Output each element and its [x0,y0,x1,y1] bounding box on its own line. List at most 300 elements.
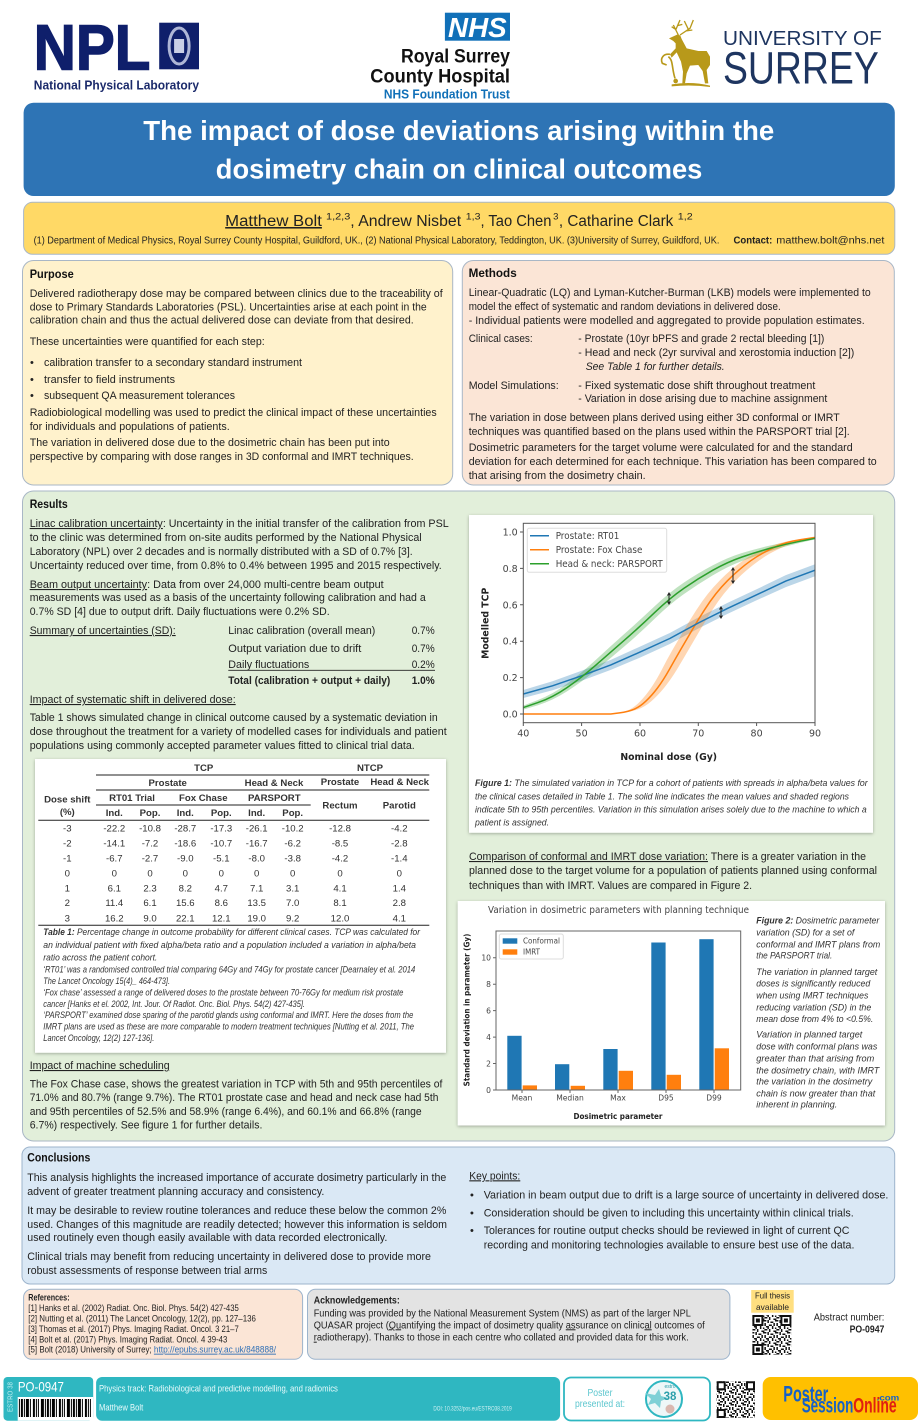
comparison text: planned dose to the target volume for a population of patients planned using conformal [469,865,877,877]
footer: poster presented at: presented at: [575,1399,625,1410]
table 1 caption: IMRT plans are used as these are more comparable to modern treatment techniques [Nutting et al. 2011, The [43,1022,414,1032]
figure 2 caption: the PARSPORT trial. [756,951,832,962]
comparison text: techniques than with IMRT. Values are compared in Figure 2. [469,880,752,892]
beam output text: 0.7% SD [4] due to output drift. Daily fluctuations were 0.2% SD. [30,606,330,618]
logo: NHS Royal Surrey County Hospital: County Hospital [370,67,510,88]
table row: 1: 6.1 [108,883,121,894]
table row: -3: -17.3 [210,824,232,835]
purpose text: subsequent QA measurement tolerances [44,390,235,402]
table row: -2: -2.8 [391,838,408,849]
panel: references [24,1289,303,1359]
QR code: footer [717,1381,755,1418]
axes frame [496,931,741,1090]
table row: -1: -1 [63,853,72,864]
poster id: PO-0947 [18,1379,64,1395]
table 1 header: Prostate [149,778,187,789]
figure 2 caption: the dosimetry chain, with IMRT [756,1065,880,1076]
table row: 1: 1.4 [393,883,407,894]
table row: -3: -22.2 [103,824,125,835]
table row: -3: -10.8 [139,824,161,835]
key points: Key points: [469,1170,520,1182]
table row: 2: 6.1 [143,898,157,909]
ESTRO 38 logo: estro [664,1384,676,1390]
table 1 header: Pop. [140,808,160,819]
table row: -1: -9.0 [177,853,194,864]
purpose text: • [30,357,34,369]
table row: 3: 12.1 [212,913,231,924]
figure 1 caption: patient is assigned. [474,818,549,829]
bars: conformal [507,939,714,1090]
table 1 header: NTCP [357,763,384,774]
systematic shift text: Impact of systematic shift in delivered dose: [30,694,236,706]
table row: 0: 0 [219,868,224,879]
affiliations: (1) Department of Medical Physics, Royal Surrey County Hospital, Guildford, UK., (2) National Physical Laboratory, Teddington, UK. (3)University of Surrey, Guildford, UK. [34,235,719,246]
methods text [469,287,877,482]
arrow: fox chase range [732,568,734,583]
reference list: [4] Bolt et al. (2017) Phys. Imaging Radiat. Oncol. 4 39-43 [28,1334,227,1344]
y axis tick labels: 0.8 [503,564,518,575]
table 1 caption: ‘PARSPORT’ examined dose sparing of the parotid glands using conformal and IMRT. Here the doses from the [43,1010,413,1020]
table row: 2: 2 [65,898,70,909]
table row: -2: -8.5 [332,838,348,849]
logo: PosterSessionOnline: Online [853,1395,897,1418]
ESTRO 38 logo [645,1381,682,1417]
purpose text [30,288,444,463]
methods text: deviation for each determined for each technique. This variation has been compared to [469,456,877,468]
summary of uncertainties table [30,625,435,687]
arrow: rt01 range [720,607,722,618]
table 1 header: TCP [194,763,214,774]
table 1 header [38,763,430,820]
purpose text: Delivered radiotherapy dose may be compared between clinics due to the traceability of [30,288,444,300]
heading: acknowledgements: Acknowledgements: [314,1295,400,1306]
table row: 3: 9.2 [286,913,299,924]
icon: stag crest [662,20,710,87]
footer: poster id block [4,1377,93,1421]
y axis tick labels: 4 [486,1033,491,1042]
purpose text: transfer to field instruments [44,374,175,386]
y axis tick labels: 6 [486,1007,491,1016]
figure 2 caption: variation (SD) for a set of [756,928,856,939]
reference list: [2] Nutting et al. (2011) The Lancet Oncology, 12(2), pp. 127–136 [28,1313,256,1323]
table 1 header: Dose shift [44,795,91,806]
y axis tick labels: 0.6 [503,600,518,611]
methods text: - Fixed systematic dose shift throughout treatment [578,380,815,392]
table row: -2: -6.2 [284,838,301,849]
table 1 caption: cancer [Hanks et el. 2002, Int. Jour. Of Radiot. Onc. Biol. Phys. 54(2) 427-435]. [43,999,305,1009]
authors: , Tao Chen [480,213,551,230]
figure 1 caption: indicate 5th to 95th percentiles. Variation in this simulation arises solely due to the machine to which a [475,805,867,816]
table row: 1: 3.1 [286,883,299,894]
table row: -2: -18.6 [174,838,196,849]
methods text: The variation in dose between plans derived using either 3D conformal or IMRT [469,412,840,424]
comparison text [469,851,877,892]
y axis tick labels [503,528,518,720]
y axis title: Standard deviation in parameter (Gy) [462,934,471,1086]
table row: -3: -10.2 [282,824,304,835]
figure 2 caption: mean dose from 4% to <0.5%. [756,1014,873,1025]
table row: 2: 2.8 [393,898,406,909]
table row: 2: 8.1 [333,898,347,909]
x axis tick labels [512,1094,722,1103]
table row: 0: 0 [112,868,117,879]
purpose text: These uncertainties were quantified for each step: [30,336,265,348]
figure 2 card [458,901,885,1126]
legend: Prostate: Fox Chase [556,545,643,556]
comparison text: Comparison of conformal and IMRT dose variation: There is a greater variation in the [469,851,866,863]
full thesis badge: available [756,1302,789,1312]
reference list: [5] Bolt (2018) University of Surrey; [28,1345,152,1355]
summary of uncertainties table: 0.7% [412,643,435,655]
table row: 1: 4.1 [333,883,347,894]
table 1 caption: The Lancet Oncology 15(4)_ 464-473]. [43,976,170,986]
logo: National Physical Laboratory: National Physical Laboratory [34,78,199,92]
table 1 header: Parotid [383,801,416,812]
figure 1 card [469,515,873,833]
table row: 2: 8.6 [215,898,228,909]
table 1 header: PARSPORT [248,793,301,804]
linac calibration text: Laboratory (NPL) over 2 decades and is normally distributed with a SD of 0.7% [3]. [30,546,413,558]
table row: -2 [63,838,408,849]
logo: University of Surrey [662,20,882,93]
table row: -2: -16.7 [246,838,268,849]
table row: -1: -5.1 [213,853,230,864]
table 1 caption: ratio across the patient cohort. [43,953,157,964]
y axis tick labels: 0.2 [503,673,518,684]
x axis tick labels: 90 [809,729,821,740]
table row: 1: 4.7 [215,883,228,894]
figure 2 caption: Variation in planned target [756,1030,863,1041]
table 1 header: Ind. [106,808,123,819]
table row: 1: 2.3 [143,883,157,894]
y axis tick labels: 10 [481,954,491,963]
abstract number [814,1313,885,1335]
footer: poster presented at [564,1378,710,1420]
figure 2 caption: chain is now greater than that [756,1088,876,1099]
table 1 header: Fox Chase [179,793,228,804]
figure 1 caption [474,778,868,829]
table row: -1 [63,853,408,864]
purpose text: The variation in delivered dose due to the dosimetric chain has been put into [30,437,390,449]
table 1 card [35,759,446,1053]
beam output text: Beam output uncertainty: Data from over 24,000 multi-centre beam output [30,579,384,591]
conclusions text [27,1172,447,1277]
legend [499,934,563,959]
authors [225,212,693,230]
methods text: - Head and neck (2yr survival and xerostomia induction [2]) [578,347,854,359]
table row: 3: 9.0 [143,913,157,924]
legend: Head & neck: PARSPORT [556,559,663,570]
table 1 header: Ind. [248,808,265,819]
summary of uncertainties table: Summary of uncertainties (SD): [30,625,176,637]
reference list: [1] Hanks et al. (2002) Radiat. Onc. Biol. Phys. 54(2) 427-435 [28,1303,239,1313]
table 1 header: Head & Neck [370,777,430,788]
table row: -3: -12.8 [329,824,351,835]
machine scheduling text: 6.7%) respectively. See figure 1 for further details. [30,1120,262,1132]
panel: methods [462,260,894,485]
reference list [28,1303,276,1355]
conclusions text: advent of greater treatment planning accuracy and consistency. [27,1186,324,1198]
methods text: that arising from the dosimetry chain. [469,470,646,482]
logo: NHS Royal Surrey County Hospital: Royal Surrey [401,47,510,68]
title banner [24,103,895,196]
x axis tick labels: 80 [751,729,763,740]
x axis tick labels: D99 [706,1094,722,1103]
table row: 3: 22.1 [176,913,195,924]
table row: 0: 0 [337,868,343,879]
full thesis badge: Full thesis [755,1290,790,1300]
conclusions text: This analysis highlights the increased importance of accurate dosimetry particularly in the [27,1172,446,1184]
figure 1 caption: the clinical cases detailed in Table 1. The solid line indicates the mean values and shaded regions [475,791,849,802]
table 1 caption: Table 1: Percentage change in outcome probability for different clinical cases. TCP was calculated for [43,927,421,938]
table 1 header: Ind. [177,808,194,819]
conclusions text: robust assessments of response between trial arms [27,1265,268,1277]
systematic shift text [30,694,447,752]
heading: results: Results [30,499,68,511]
systematic shift text: dose throughout the treatment for a variety of modelled cases for individuals and patient [30,726,447,738]
key points: • [470,1189,474,1201]
authors panel [24,202,895,254]
key points: Tolerances for routine output checks should be reviewed in light of current QC [484,1225,849,1237]
figure 2 caption: inherent in planning. [756,1100,837,1111]
panel: acknowledgements [308,1289,730,1359]
purpose text: perspective by comparing with dose ranges in 3D conformal and IMRT techniques. [30,451,414,463]
purpose text: for individuals and populations of patients. [30,421,230,433]
figure 2 caption: reducing variation (SD) in the [756,1003,871,1014]
table 1 caption [43,927,421,1043]
y axis tick labels: 1.0 [503,528,518,538]
acknowledgements text: radiotherapy). Thanks to those in each centre who collated and provided data for this work. [314,1333,689,1344]
conclusions text: It may be desirable to review routine tolerances and reduce these below the common 2% [27,1205,447,1217]
purpose text: calibration chain and thus the actual delivered dose can deviate from that desired. [30,315,414,327]
logo: NHS Royal Surrey County Hospital: NHS Foundation Trust [384,86,511,101]
key points: recording and monitoring technologies available to ensure best use of the data. [484,1239,854,1251]
heading: references: References: [28,1293,70,1303]
authors: 1,2 [678,212,693,222]
table row: -1: -2.7 [142,853,158,864]
table row: -3 [63,824,408,835]
methods text: Linear-Quadratic (LQ) and Lyman-Kutcher-Burman (LKB) models were implemented to [469,287,871,299]
machine scheduling text: The Fox Chase case, shows the greatest variation in TCP with 5th and 95th percentiles of [30,1079,443,1091]
y axis tick labels: 0.4 [503,637,518,648]
summary of uncertainties table: Daily fluctuations [228,659,310,671]
systematic shift text: populations using commonly accepted parameter values fitted to clinical trial data. [30,740,415,752]
logo: PosterSessionOnline [763,1377,918,1420]
table 1 header: Rectum [322,801,358,812]
panel: conclusions [22,1147,895,1284]
contact: Contact: [734,235,772,246]
reference list: http://epubs.surrey.ac.uk/848888/ [154,1345,276,1355]
acknowledgements text: QUASAR project (Quantifying the impact of dosimetry quality assurance on clinical outcomes of [314,1320,705,1331]
key points [469,1170,888,1251]
methods text: Dosimetric parameters for the target volume were calculated for and the standard [469,442,853,454]
key points: Variation in beam output due to drift is a large source of uncertainty in delivered dose. [484,1189,888,1201]
logo: National Physical Laboratory [34,11,199,92]
machine scheduling text: Impact of machine scheduling [30,1060,170,1072]
figure 2 caption: The variation in planned target [756,967,878,978]
table row: -3: -26.1 [246,824,268,835]
table row: -1: -4.2 [332,853,348,864]
contact [734,235,885,246]
logo: PosterSessionOnline: Session [802,1395,853,1418]
x axis tick labels: D95 [658,1094,674,1103]
x axis tick labels: 70 [692,729,704,740]
legend [527,528,667,572]
x axis tick labels: Mean [512,1094,533,1103]
acknowledgements text [314,1309,705,1344]
footer: poster presented at: Poster [588,1388,613,1399]
figure 2 caption: Figure 2: Dosimetric parameter [756,916,880,927]
summary of uncertainties table: Output variation due to drift [228,643,361,655]
logo: National Physical Laboratory: NPL [34,11,150,83]
linac calibration text: Linac calibration uncertainty: Uncertainty in the initial transfer of the calibration from PSL [30,518,449,530]
x axis tick labels: Median [556,1094,584,1103]
key points: Consideration should be given to including this uncertainty within clinical trials. [484,1207,854,1219]
linac calibration text [30,518,449,572]
linac calibration text: Uncertainty reduced over time, from 0.8% to 0.4% between 1995 and 2015 respectively. [30,560,442,572]
table 1 caption: Lancet Oncology, 12(2) 127-136]. [43,1033,154,1043]
table row: 2: 7.0 [286,898,299,909]
logo: University of Surrey: UNIVERSITY OF [723,27,882,50]
axes frame [523,523,815,723]
x axis tick labels: Max [610,1094,626,1103]
table row: 0: 0 [65,868,70,879]
conclusions text: used. Changes of this magnitude are readily detected; however this information is seldom [27,1219,447,1231]
bars: IMRT [523,1048,729,1090]
table 1 header: Prostate [321,777,359,788]
figure 2 caption: doses is significantly reduced [756,979,871,990]
table row: 0: 0 [147,868,153,879]
summary of uncertainties table: 1.0% [412,675,435,687]
table 1 header: Pop. [211,808,232,819]
footer: track information: DOI: 10.3252/pos.eu/ESTRO38.2019 [433,1406,512,1412]
figure 2 caption [756,916,880,1111]
methods text: Clinical cases: [469,333,533,345]
panel: purpose [22,260,453,485]
methods text: model the effect of systematic and random deviations in delivered dose. [469,301,781,313]
table row: -1: -6.7 [106,853,123,864]
table row: 2: 11.4 [105,898,124,909]
y axis tick labels: 0 [486,1086,491,1095]
logo: PosterSessionOnline: Poster [783,1381,829,1406]
summary of uncertainties table: Linac calibration (overall mean) [228,625,375,637]
table row: 1 [65,883,407,894]
table row: 0: 0 [183,868,188,879]
purpose text: calibration transfer to a secondary standard instrument [44,357,302,369]
table row: -2: -2 [63,838,72,849]
table row: -3: -3 [63,824,72,835]
y axis tick labels [481,954,491,1095]
purpose text: dose to Primary Standards Laboratories (PSL). Uncertainties arise at each point in the [30,302,427,314]
authors: , Catharine Clark [559,213,674,230]
table row: 3 [65,913,406,924]
table 1 caption: an individual patient with fixed alpha/beta ratio and a population included a variation in alpha/beta [43,940,416,951]
methods text: techniques was quantified based on the plans used within the PARSPORT trial [2]. [469,426,850,438]
table row: 0: 0 [397,868,402,879]
table row: 3: 12.0 [331,913,349,924]
table 1 caption: ‘Fox chase’ assessed a range of delivered doses to the prostate between 70-76Gy for medium risk prostate [43,988,403,998]
barcode [19,1399,92,1417]
machine scheduling text [30,1060,443,1132]
key points: • [470,1207,474,1219]
footer: track information: Physics track: Radiobiological and predictive modelling, and radiomics [99,1384,338,1395]
acknowledgements text: Funding was provided by the National Measurement System (NMS) as part of the larger NPL [314,1309,691,1320]
QR code: thesis [752,1315,791,1355]
title banner: dosimetry chain on clinical outcomes [216,153,702,184]
x axis tick labels: 60 [634,729,646,740]
authors: 1,3 [466,212,480,222]
conclusions text: Clinical trials may benefit from reducing uncertainty in delivered dose to provide more [27,1251,431,1263]
table row: -2: -7.2 [142,838,158,849]
figure 2 caption: dose with conformal plans was [756,1042,877,1053]
methods text: See Table 1 for further details. [586,361,725,373]
systematic shift text: Table 1 shows simulated change in clinical outcome caused by a systematic deviation in [30,712,438,724]
legend: Prostate: RT01 [556,531,619,542]
full thesis badge [751,1290,794,1313]
line chart: modelled TCP [480,523,821,763]
ESTRO 38 logo: 38 [664,1391,677,1403]
table row: -1: -8.0 [248,853,265,864]
x axis title: Dosimetric parameter [574,1112,663,1121]
summary of uncertainties table: 0.7% [412,625,435,637]
bar chart: dosimetric parameter variation [462,905,749,1121]
table 1 header: Head & Neck [245,778,304,789]
table row: 3: 3 [65,913,70,924]
table row: 3: 4.1 [393,913,406,924]
figure 2 caption: when using IMRT techniques [756,991,868,1002]
linac calibration text: to the clinic was determined from on-site audits performed by the National Physical [30,532,422,544]
table row: 2: 13.5 [247,898,266,909]
machine scheduling text: and 95th percentiles of 52.5% and 58.9% (range 6.4%), and 60.1% and 66.8% (range [30,1106,422,1118]
x axis tick labels: 50 [576,729,588,740]
heading: purpose: Purpose [30,269,74,281]
panel: results [22,491,895,1141]
chart title: Variation in dosimetric parameters with planning technique [488,905,749,916]
footer: track information: Matthew Bolt [99,1403,143,1414]
summary of uncertainties table: Total (calibration + output + daily) [228,675,391,687]
beam output text: measurements was used as a basis of the uncertainty following calibration and had a [30,592,427,604]
purpose text: • [30,390,34,402]
methods text: - Variation in dose arising due to machine assignment [578,393,827,405]
figure 1 caption: Figure 1: The simulated variation in TCP for a cohort of patients with spreads in alpha/beta values for [475,778,868,789]
table row: 3: 16.2 [105,913,124,924]
purpose text: Radiobiological modelling was used to predict the clinical impact of these uncertainties [30,407,437,419]
beam output text [30,579,427,618]
table row: -1: -3.8 [284,853,301,864]
table 1 header: (%) [60,807,75,818]
methods text: - Prostate (10yr bPFS and grade 2 rectal bleeding [1]) [578,333,824,345]
methods text: - Individual patients were modelled and aggregated to provide population estimates. [469,315,865,327]
table row: 0: 0 [254,868,259,879]
figure 2 caption: the variation in the dosimetry [756,1077,873,1088]
footer: track information [96,1377,560,1421]
rotated conference label: ESTRO 38 [6,1382,14,1412]
table row: -3: -4.2 [391,824,408,835]
machine scheduling text: 71.0% and 80.7% (range 9.7%). The RT01 prostate case and head and neck case had 5th [30,1092,438,1104]
logo: PosterSessionOnline: .com [877,1392,900,1402]
legend: Conformal [523,936,560,945]
methods text: Model Simulations: [469,380,559,392]
conclusions text: used routinely even though easily available with data recorded electronically. [27,1232,387,1244]
table row: 1: 1 [65,883,70,894]
authors: , Andrew Nisbet [350,213,462,230]
y axis tick labels: 8 [486,980,491,989]
abstract number: Abstract number: [814,1313,884,1324]
heading: methods: Methods [469,268,517,280]
logo: NHS Royal Surrey County Hospital [370,12,511,101]
table 1 header: Pop. [282,808,303,819]
table row: 2: 15.6 [176,898,195,909]
